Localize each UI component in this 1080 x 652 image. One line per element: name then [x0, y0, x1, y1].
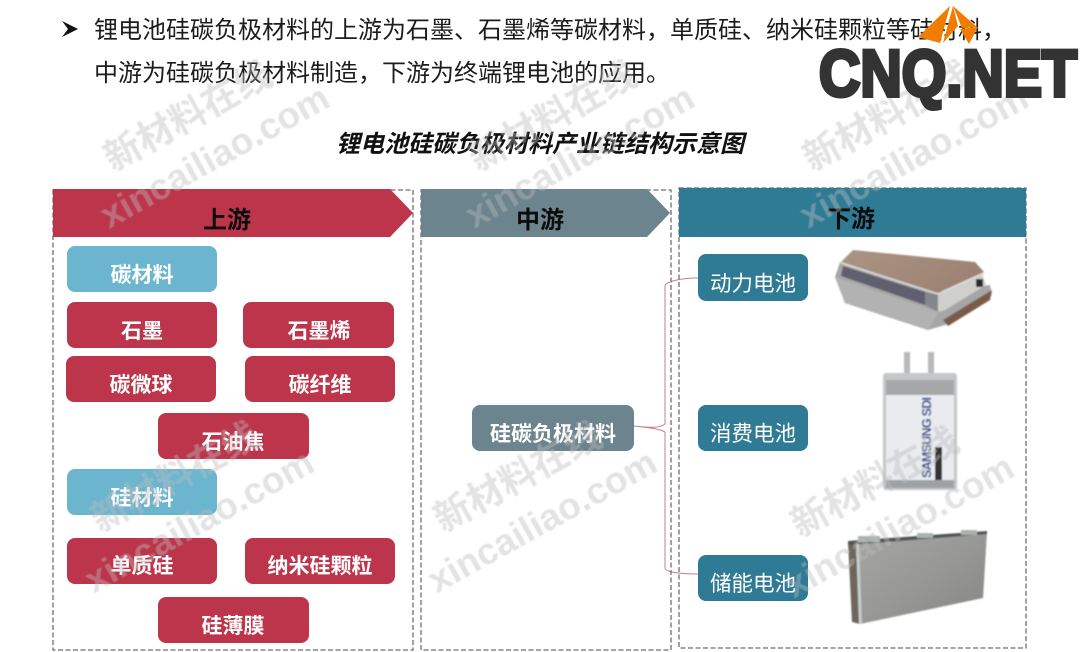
item: silicon film: [158, 597, 309, 643]
item: energy storage battery: [698, 555, 808, 601]
item: silicon-carbon anode material: [472, 405, 634, 451]
midstream header: 中游: [516, 207, 564, 234]
watermark top centre: xincailiao.com: [458, 77, 701, 236]
category: carbon materials: [67, 246, 217, 292]
item: silicon-carbon anode material: 硅碳负极材料: [490, 423, 616, 446]
item: carbon fibre: 碳纤维: [288, 374, 352, 397]
watermark top centre: 新材料在线: [462, 53, 644, 179]
item: elemental silicon: 单质硅: [110, 555, 174, 578]
midstream header: [421, 189, 670, 237]
image: energy storage cell: [848, 530, 987, 624]
upstream header: 上游: [203, 207, 251, 234]
icon: orange origami bird: [918, 6, 978, 44]
watermark bottom centre: xincailiao.com: [421, 441, 664, 601]
downstream header: 下游: [827, 206, 875, 233]
image: power battery pack: [835, 250, 992, 330]
item: petroleum coke: 石油焦: [202, 431, 264, 454]
item: petroleum coke: [158, 413, 309, 459]
chart title: 锂电池硅碳负极材料产业链结构示意图: [336, 131, 748, 158]
category: silicon materials: 硅材料: [110, 487, 174, 510]
watermark bottom centre: 新材料在线: [427, 414, 609, 540]
item: carbon microspheres: 碳微球: [110, 374, 172, 397]
item: graphene: 石墨烯: [288, 320, 350, 343]
watermark top left: xincailiao.com: [93, 77, 336, 236]
watermark bottom left: xincailiao.com: [78, 441, 321, 601]
watermark top right: xincailiao.com: [792, 77, 1035, 236]
upstream header: [53, 189, 413, 237]
intro line 1: 锂电池硅碳负极材料的上游为石墨、石墨烯等碳材料，单质硅、纳米硅颗粒等硅材料，: [94, 17, 1006, 44]
panel: downstream: [679, 188, 1026, 648]
category: silicon materials: [67, 469, 217, 515]
image: consumer pouch cell: [883, 352, 957, 490]
watermark bottom right: xincailiao.com: [778, 446, 1021, 606]
item: graphite: [67, 302, 217, 348]
category: carbon materials: 碳材料: [110, 264, 174, 287]
item: carbon fibre: [245, 356, 395, 402]
item: silicon film: 硅薄膜: [202, 615, 264, 638]
watermark top right: 新材料在线: [796, 53, 978, 179]
downstream header: [679, 188, 1026, 237]
logo: CNQ.NET: [819, 6, 1077, 110]
item: consumer battery: 消费电池: [710, 422, 796, 446]
panel: midstream: [421, 189, 671, 650]
item: power battery: [698, 254, 808, 301]
item: carbon microspheres: [66, 356, 216, 402]
watermark bottom left: 新材料在线: [84, 414, 266, 540]
item: graphene: [243, 302, 394, 348]
item: nano silicon particles: 纳米硅颗粒: [268, 555, 372, 578]
panel: upstream: [53, 189, 413, 650]
item: elemental silicon: [67, 538, 217, 584]
watermarks: [53, 35, 1035, 606]
watermark top left: 新材料在线: [97, 53, 279, 179]
item: energy storage battery: 储能电池: [710, 572, 796, 596]
connector lines: [634, 278, 698, 574]
item: consumer battery: [698, 405, 808, 451]
intro bullet text: [62, 17, 1006, 87]
item: graphite: 石墨: [121, 320, 163, 343]
item: nano silicon particles: [245, 538, 395, 584]
watermark bottom right: 新材料在线: [784, 419, 966, 545]
image: consumer pouch cell: SAMSUNG SDI: [920, 397, 934, 478]
intro line 2: 中游为硅碳负极材料制造，下游为终端锂电池的应用。: [94, 60, 670, 87]
item: power battery: 动力电池: [710, 272, 796, 296]
icon: bullet arrow: [62, 21, 78, 37]
